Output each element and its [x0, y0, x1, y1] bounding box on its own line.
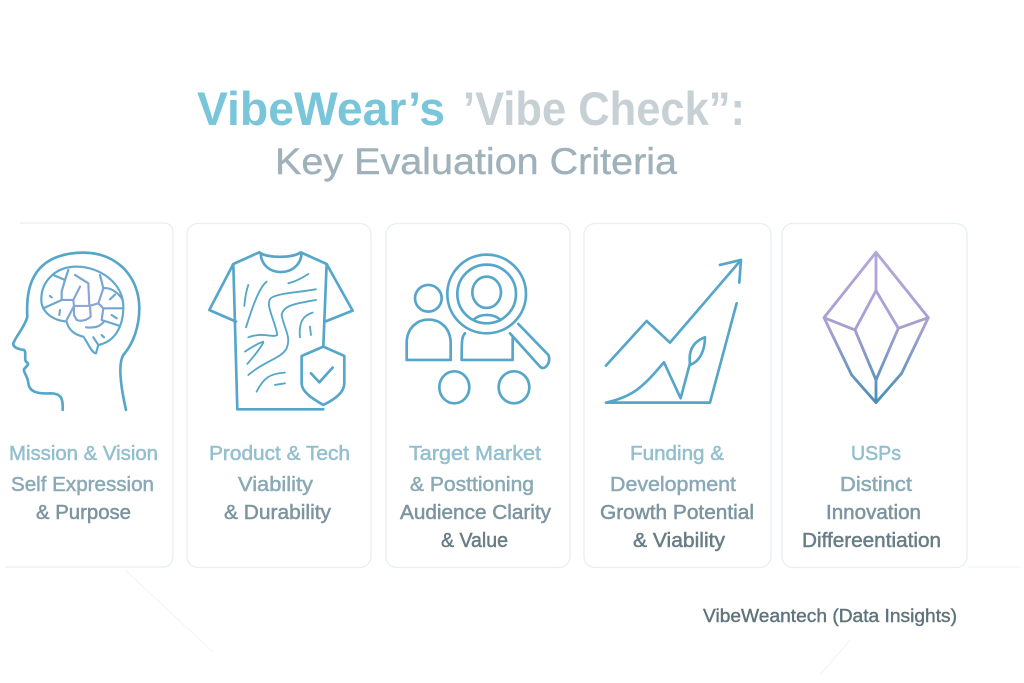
description: target market: Audience Clarity [400, 501, 552, 524]
heading: target market: Target Market [409, 442, 541, 465]
source credit: VibeWeantech (Data Insights) [703, 606, 957, 626]
heading: product and tech: Product & Tech [209, 442, 350, 465]
description: funding and development [600, 501, 754, 552]
card outline: product [187, 224, 371, 568]
card outline: funding [584, 224, 771, 568]
title [197, 82, 745, 135]
heading: target market [409, 442, 541, 496]
description: target market [400, 501, 552, 552]
description: mission and vision: Self Expression [11, 473, 154, 496]
description: USPs: Innovation [826, 501, 921, 524]
heading: mission and vision: Mission & Vision [9, 442, 158, 465]
description: product and tech: Viability [238, 473, 314, 496]
icon: growth chart with sprout [606, 260, 741, 403]
subtitle: Key Evaluation Criteria [275, 141, 677, 182]
description: funding and development: Growth Potential [600, 501, 754, 524]
description: USPs: Differeentiation [802, 529, 941, 552]
card outline: target [386, 224, 570, 568]
panel: USPs [782, 224, 967, 568]
description: mission and vision [11, 473, 154, 524]
heading: funding and development: Funding & [630, 442, 724, 465]
description: USPs [802, 473, 941, 552]
description: USPs: Distinct [840, 473, 912, 496]
heading: target market: & Posttioning [410, 473, 534, 496]
icon: audience and magnifier [407, 255, 549, 403]
description: product and tech: & Durability [224, 501, 332, 524]
title: VibeWear’s [197, 82, 445, 135]
icon: gem [824, 252, 928, 403]
panel: product and tech [187, 224, 371, 568]
heading: funding and development [610, 442, 736, 496]
panel: funding and development [584, 224, 771, 568]
panel: mission and vision [5, 223, 173, 567]
description: product and tech [224, 473, 332, 524]
card outline: USPs [782, 224, 967, 568]
description: target market: & Value [441, 529, 508, 552]
icon: t-shirt with shield [209, 252, 353, 409]
heading: funding and development: Development [610, 473, 736, 496]
icon: head with brain [13, 253, 139, 410]
panel: target market [386, 224, 570, 568]
card outline: mission [5, 223, 173, 567]
description: mission and vision: & Purpose [36, 501, 131, 524]
title: ’Vibe Check”: [463, 82, 745, 135]
description: funding and development: & Viability [633, 529, 726, 552]
heading: USPs: USPs [851, 442, 901, 465]
